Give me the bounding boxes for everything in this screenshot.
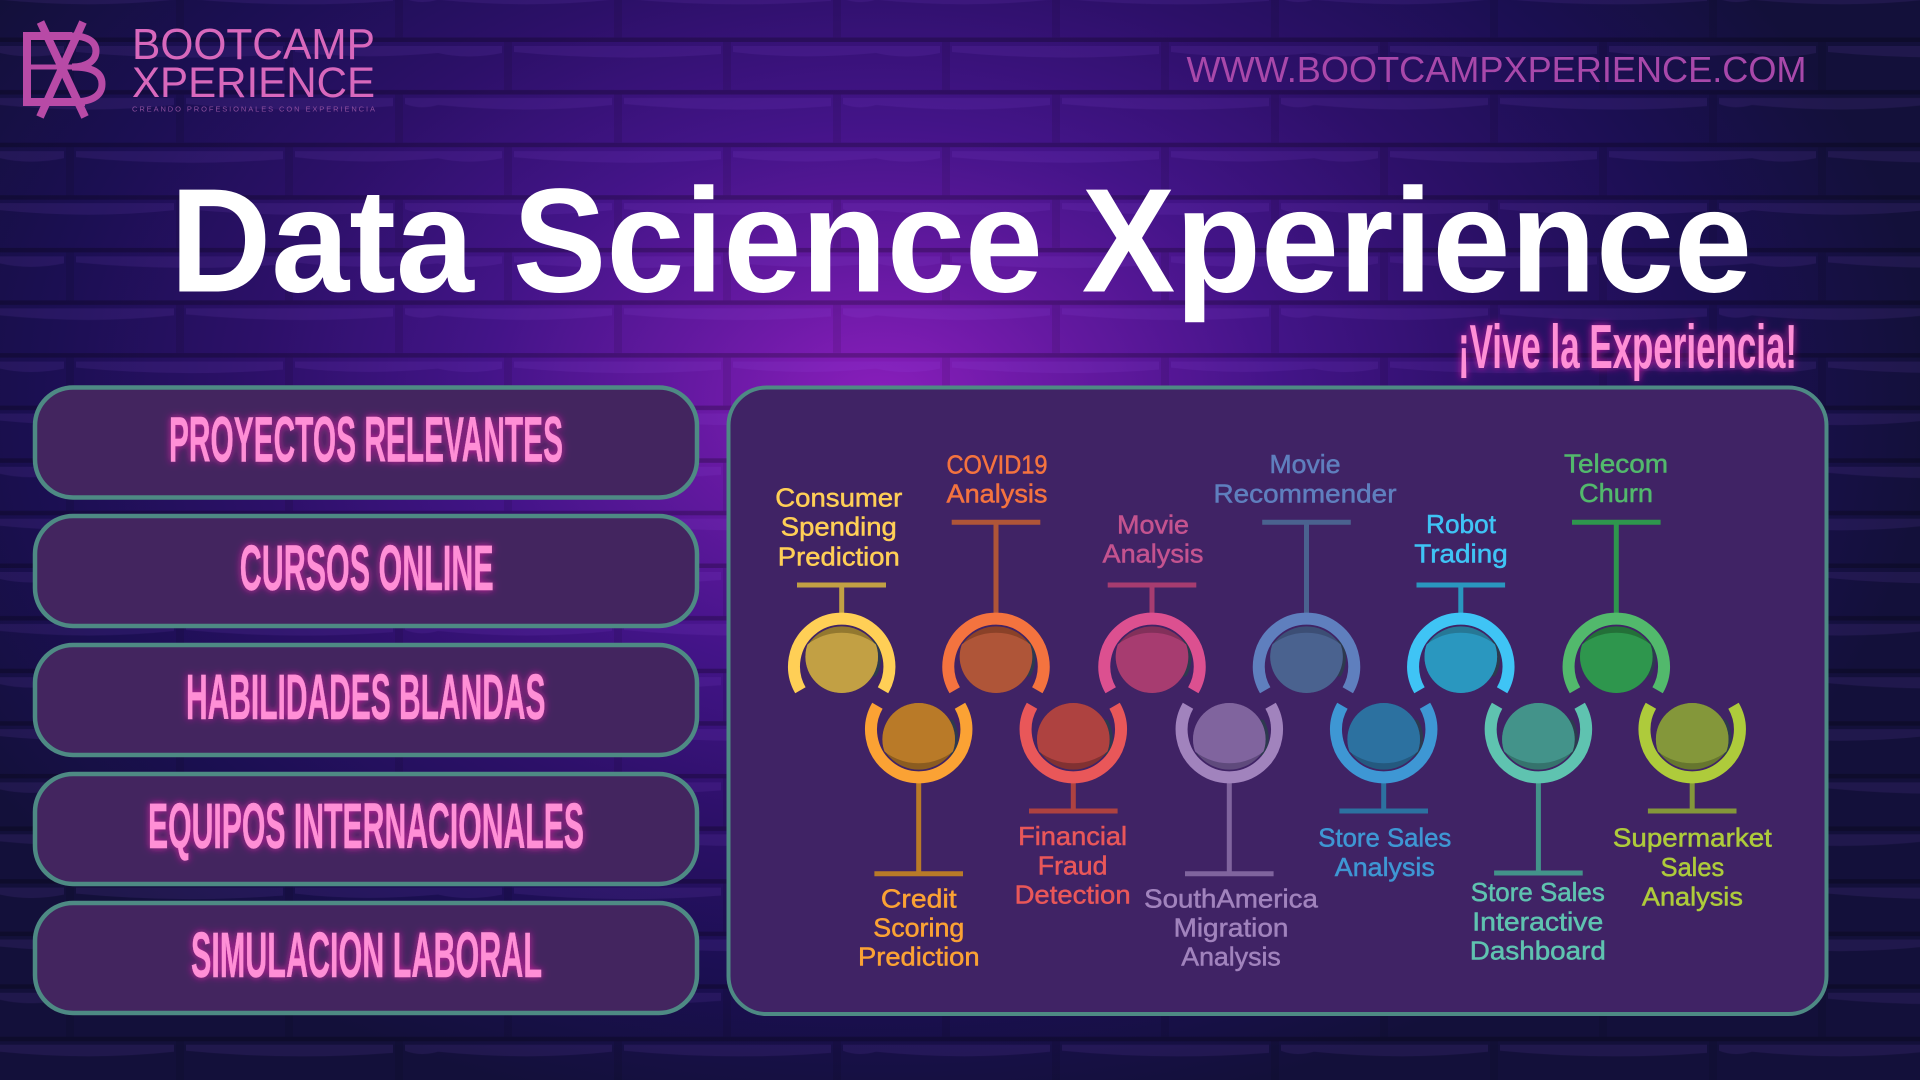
icon: EXB monogram	[27, 22, 102, 117]
node: Supermarket Sales Analysis	[1613, 701, 1773, 911]
node: Movie Analysis: Analysis	[1102, 539, 1204, 569]
node: Supermarket Sales Analysis: Supermarket	[1613, 823, 1773, 853]
panel: cursos online	[35, 516, 697, 626]
node: Telecom Churn: Churn	[1579, 478, 1653, 508]
node: Robot Trading: Robot	[1426, 509, 1497, 539]
node: Store Sales Interactive Dashboard: Store Sales	[1471, 877, 1605, 907]
node: Movie Analysis	[1102, 509, 1204, 695]
node: Supermarket Sales Analysis: Sales	[1661, 852, 1724, 882]
node: Movie Analysis: Movie	[1117, 509, 1189, 539]
node: COVID19 Analysis	[946, 449, 1048, 695]
node: Credit Scoring Prediction: Credit	[881, 883, 957, 913]
node: SouthAmerica Migration Analysis: SouthAmerica	[1144, 883, 1318, 913]
panel: proyectos relevantes: PROYECTOS RELEVANTES	[169, 404, 563, 476]
node: Movie Recommender	[1214, 449, 1397, 695]
node: Consumer Spending Prediction	[775, 483, 903, 695]
panel: cursos online: CURSOS ONLINE	[240, 532, 494, 604]
node: Consumer Spending Prediction: Consumer	[775, 483, 903, 513]
node: COVID19 Analysis: COVID19	[946, 449, 1048, 479]
node: COVID19 Analysis: Analysis	[946, 479, 1048, 509]
node: Store Sales Interactive Dashboard: Interactive	[1472, 906, 1603, 936]
panel: simulacion laboral	[35, 903, 697, 1013]
node: SouthAmerica Migration Analysis: Migration	[1174, 913, 1288, 943]
panel: proyectos relevantes	[35, 388, 697, 498]
node: Consumer Spending Prediction: Spending	[781, 512, 897, 542]
node: Financial Fraud Detection	[1015, 701, 1131, 910]
node: Store Sales Analysis: Store Sales	[1318, 823, 1451, 853]
panel: equipos internacionales: EQUIPOS INTERNACIONALES	[148, 790, 584, 862]
panel: projects timeline	[728, 388, 1826, 1014]
node: Telecom Churn	[1564, 449, 1668, 695]
node: Telecom Churn: Telecom	[1564, 449, 1668, 479]
node: Robot Trading	[1413, 509, 1509, 695]
logo: Bootcamp Xperience	[27, 21, 375, 117]
website url: WWW.BOOTCAMPXPERIENCE.COM	[1186, 49, 1806, 90]
node: Credit Scoring Prediction: Scoring	[873, 913, 964, 943]
panel: habilidades blandas: HABILIDADES BLANDAS	[186, 661, 546, 733]
logo wordmark: CREANDO PROFESIONALES CON EXPERIENCIA	[132, 104, 375, 114]
node: SouthAmerica Migration Analysis	[1144, 701, 1318, 972]
node: Supermarket Sales Analysis: Analysis	[1642, 881, 1743, 911]
panel: simulacion laboral: SIMULACION LABORAL	[191, 919, 542, 991]
node: Store Sales Analysis	[1318, 701, 1451, 882]
panel: habilidades blandas	[35, 645, 697, 755]
node: Consumer Spending Prediction: Prediction	[778, 541, 900, 571]
node: Store Sales Interactive Dashboard	[1470, 701, 1606, 966]
node: Financial Fraud Detection: Financial	[1018, 821, 1127, 851]
node: Movie Recommender: Recommender	[1214, 478, 1397, 508]
node: Store Sales Analysis: Analysis	[1335, 852, 1435, 882]
node: Financial Fraud Detection: Detection	[1015, 880, 1131, 910]
title: Data Science Xperience	[170, 158, 1752, 324]
panel: equipos internacionales	[35, 774, 697, 884]
node: Robot Trading: Trading	[1414, 538, 1508, 568]
logo wordmark: XPERIENCE	[132, 59, 375, 107]
node: Movie Recommender: Movie	[1270, 449, 1340, 479]
node: Store Sales Interactive Dashboard: Dashboard	[1470, 936, 1606, 966]
logo wordmark	[132, 21, 375, 114]
node: Financial Fraud Detection: Fraud	[1038, 850, 1107, 880]
node: SouthAmerica Migration Analysis: Analysis	[1181, 942, 1281, 972]
node: Credit Scoring Prediction: Prediction	[858, 942, 980, 972]
node: Credit Scoring Prediction	[858, 701, 980, 972]
logo wordmark: BOOTCAMP	[132, 21, 375, 69]
